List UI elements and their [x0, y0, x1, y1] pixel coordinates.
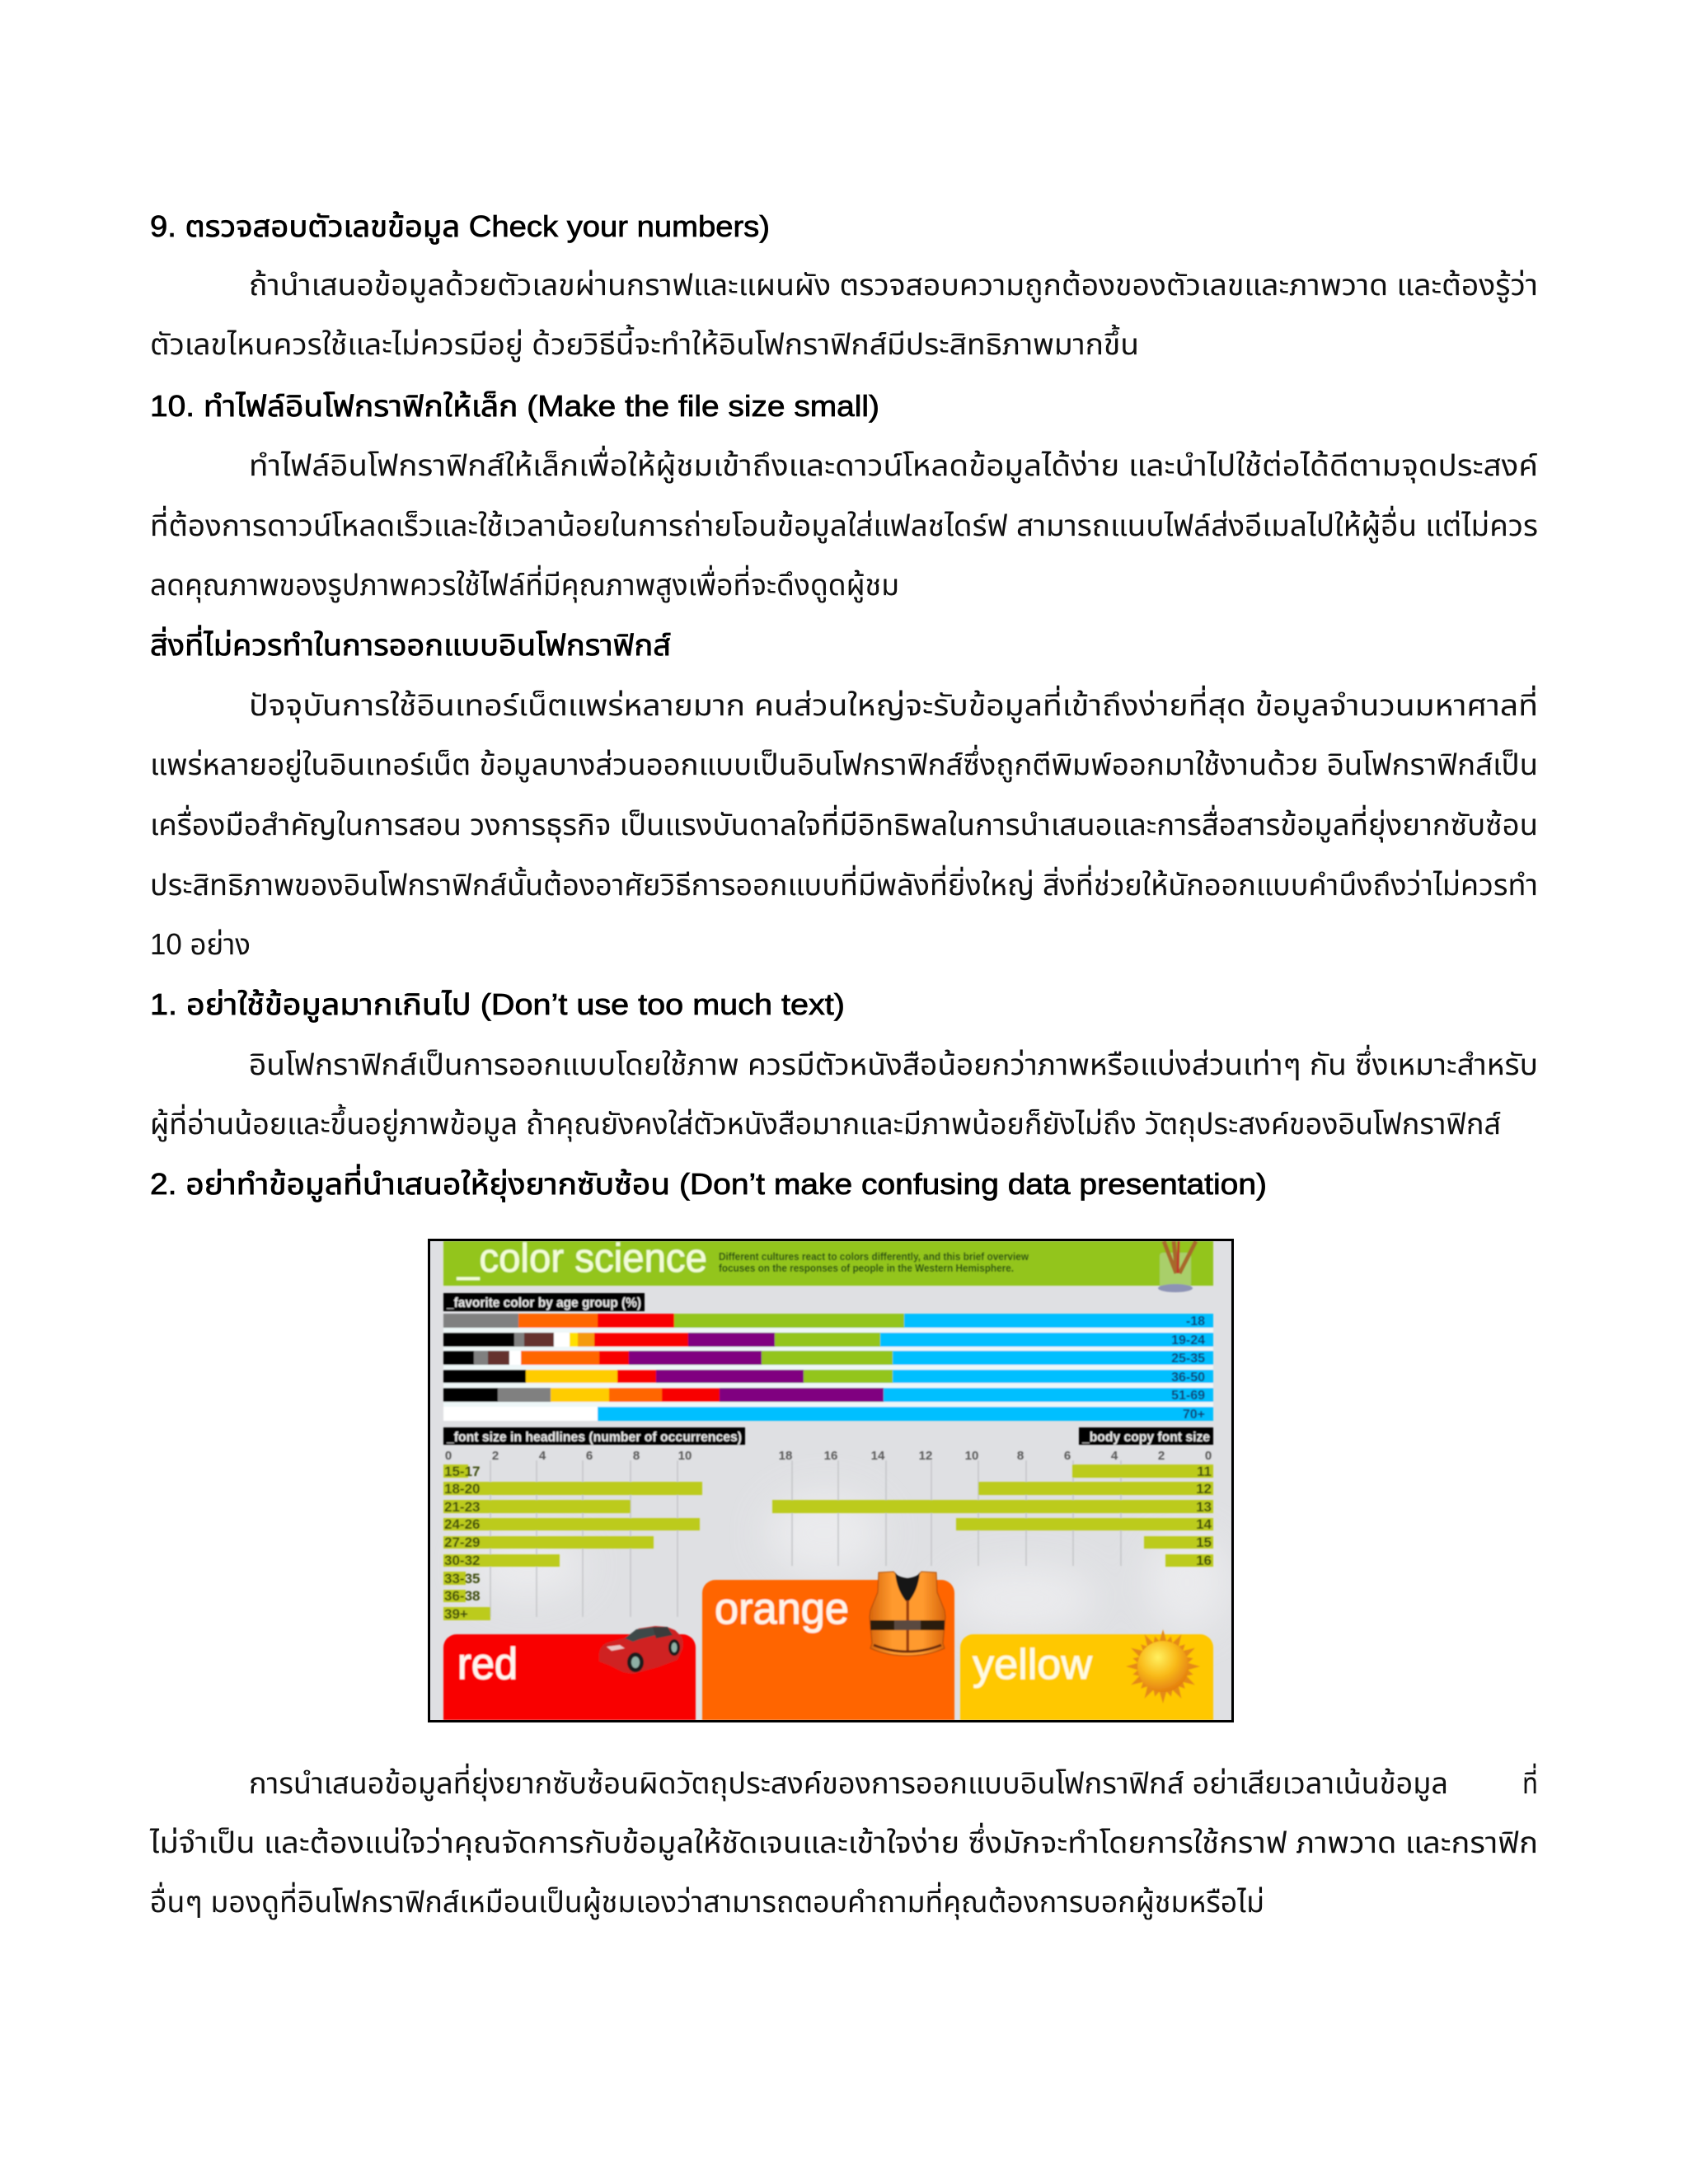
axis numbers: right: 4: [1111, 1449, 1118, 1463]
banner description: focuses on the responses of people in the Western Hemisphere.: [719, 1262, 1014, 1274]
panel: red: [443, 1626, 696, 1720]
axis numbers: left: 4: [539, 1449, 546, 1463]
paragraph: too much text: [150, 1044, 1538, 1141]
heading: 1 do not use too much text: 1. อย่าใช้ข้อมูลมากเกินไป (Don’t use too much text): [150, 987, 845, 1022]
bar labels: body sizes: 11: [1197, 1464, 1212, 1479]
banner description: [719, 1250, 1029, 1274]
paragraph: things not to do: 10 อย่าง: [150, 927, 251, 961]
yellow label: yellow: [973, 1641, 1092, 1689]
bar labels: headline sizes: 15-17: [444, 1464, 480, 1479]
banner title: _color science: [457, 1236, 707, 1281]
paragraph line 1 start: การนำเสนอข้อมูลที่ยุ่งยากซับซ้อนผิดวัตถุประสงค์ของการออกแบบอินโฟกราฟิกส์ อย่าเสียเวลาเน้นข้อมูล: [249, 1763, 1448, 1801]
paragraph: check your numbers: [150, 268, 1538, 362]
figure: color science infographic: [429, 1236, 1233, 1721]
bar labels: headline sizes: 18-20: [444, 1481, 480, 1497]
bar labels: headline sizes: 30-32: [444, 1553, 480, 1568]
bars: headline sizes: [443, 1465, 702, 1620]
stacked bar chart: favorite color by age group: [443, 1314, 1213, 1422]
bar labels: headline sizes: [444, 1464, 480, 1622]
panel: yellow: [960, 1629, 1213, 1720]
bar labels: body sizes: 14: [1196, 1516, 1212, 1532]
axis numbers: right: 6: [1064, 1449, 1071, 1463]
axis numbers: right: [779, 1449, 1212, 1463]
heading: 9 check your numbers: 9. ตรวจสอบตัวเลขข้อมูล Check your numbers): [150, 209, 770, 244]
paragraph: too much text: ผู้ที่อ่านน้อยและขึ้นอยู่ภาพข้อมูล ถ้าคุณยังคงใส่ตัวหนังสือมากและมีภาพน้อยก็ยังไม่ถึง วัตถุประสงค์ของอินโฟกราฟิกส์: [150, 1104, 1501, 1141]
text block: lower document text: [149, 1763, 1538, 1919]
icon: pencil jar: [1158, 1241, 1196, 1292]
axis numbers: right: 12: [919, 1449, 932, 1463]
text block: upper document text: [150, 209, 1538, 1202]
axis numbers: right: 10: [965, 1449, 978, 1463]
axis numbers: right: 2: [1158, 1449, 1165, 1463]
figure paper background: [430, 1241, 1231, 1720]
bar labels: headline sizes: 27-29: [444, 1535, 480, 1550]
label: body copy font size: _body copy font size: [1081, 1429, 1210, 1445]
paragraph: check your numbers: ถ้านำเสนอข้อมูลด้วยตัวเลขผ่านกราฟและแผนผัง ตรวจสอบความถูกต้องของตัวเลขและภาพวาด และต้องรู้ว่า: [249, 268, 1538, 302]
bar labels: headline sizes: 39+: [444, 1606, 468, 1622]
heading: things not to do: สิ่งที่ไม่ควรทำในการออกแบบอินโฟกราฟิกส์: [150, 625, 671, 662]
row: 25-35: [443, 1351, 1213, 1366]
paragraph: things not to do: ปัจจุบันการใช้อินเทอร์เน็ตแพร่หลายมาก คนส่วนใหญ่จะรับข้อมูลที่เข้าถึงง่ายที่สุด ข้อมูลจำนวนมหาศาลที่: [249, 685, 1538, 723]
paragraph: too much text: อินโฟกราฟิกส์เป็นการออกแบบโดยใช้ภาพ ควรมีตัวหนังสือน้อยกว่าภาพหรือแบ่งส่วนเท่าๆ กัน ซึ่งเหมาะสำหรับ: [249, 1044, 1538, 1081]
bars: body sizes: [772, 1465, 1213, 1567]
paragraph lines 2 and 3: ไม่จำเป็น และต้องแน่ใจว่าคุณจัดการกับข้อมูลให้ชัดเจนและเข้าใจง่าย ซึ่งมักจะทำโดยการใช้กราฟ ภาพวาด และกราฟิก: [149, 1822, 1538, 1860]
banner: color science: [443, 1236, 1213, 1292]
bar labels: headline sizes: 21-23: [444, 1499, 480, 1515]
icon: life vest: [870, 1572, 945, 1656]
row: 70+: 70+: [1183, 1408, 1205, 1422]
paragraph: file size: [150, 445, 1538, 602]
axis numbers: right: 16: [824, 1449, 837, 1463]
bar labels: headline sizes: 33-35: [444, 1571, 480, 1586]
panel: orange: [702, 1572, 954, 1720]
axis numbers: right: 18: [779, 1449, 792, 1463]
bar labels: body sizes: [1196, 1464, 1212, 1568]
label: font size in headlines: _font size in headlines (number of occurrences): [446, 1429, 742, 1445]
bar labels: body sizes: 15: [1196, 1535, 1212, 1550]
row: 25-35: 25-35: [1171, 1352, 1205, 1366]
row: 19-24: 19-24: [1171, 1333, 1205, 1347]
paragraph: file size: ทำไฟล์อินโฟกราฟิกส์ให้เล็กเพื่อให้ผู้ชมเข้าถึงและดาวน์โหลดข้อมูลได้ง่าย และนำไปใช้ต่อได้ดีตามจุดประสงค์: [249, 445, 1538, 483]
figure content: [443, 1236, 1213, 1720]
label: favorite color by age group: _favorite color by age group (%): [446, 1295, 641, 1310]
chart: body copy font size: [772, 1449, 1213, 1568]
chart: headline font size occurrences: [443, 1449, 702, 1622]
axis numbers: right: 14: [871, 1449, 885, 1463]
row: under 18: -18: [1186, 1315, 1205, 1329]
axis numbers: right: 8: [1017, 1449, 1024, 1463]
heading: 2 do not make confusing data presentation: 2. อย่าทำข้อมูลที่นำเสนอให้ยุ่งยากซับซ้อน (Don’t make confusing data presentation): [150, 1164, 1267, 1202]
paragraph: file size: ลดคุณภาพของรูปภาพควรใช้ไฟล์ที่มีคุณภาพสูงเพื่อที่จะดึงดูดผู้ชม: [150, 565, 899, 602]
axis numbers: right: 0: [1205, 1449, 1212, 1463]
row: 36-50: [443, 1370, 1213, 1385]
banner description: Different cultures react to colors differently, and this brief overview: [719, 1250, 1029, 1263]
paragraph lines 2 and 3: อื่นๆ มองดูที่อินโฟกราฟิกส์เหมือนเป็นผู้ชมเองว่าสามารถตอบคำถามที่คุณต้องการบอกผู้ชมหรือไม่: [150, 1882, 1264, 1919]
axis numbers: left: 0: [445, 1449, 452, 1463]
row: 51-69: [443, 1388, 1213, 1403]
bar labels: body sizes: 13: [1196, 1499, 1212, 1515]
paragraph: file size: ที่ต้องการดาวน์โหลดเร็วและใช้เวลาน้อยในการถ่ายโอนข้อมูลใส่แฟลชไดร์ฟ สามารถแนบไฟล์ส่งอีเมลไปให้ผู้อื่น แต่ไม่ควร: [150, 505, 1538, 543]
paragraph: things not to do: ประสิทธิภาพของอินโฟกราฟิกส์นั้นต้องอาศัยวิธีการออกแบบที่มีพลังที่ยิ่งใหญ่ สิ่งที่ช่วยให้นักออกแบบคำนึงถึงว่าไม่ควรทำ: [150, 865, 1538, 902]
bar labels: body sizes: 16: [1196, 1553, 1212, 1568]
paragraph: check your numbers: ตัวเลขไหนควรใช้และไม่ควรมีอยู่ ด้วยวิธีนี้จะทำให้อินโฟกราฟิกส์มีประสิทธิภาพมากขึ้น: [150, 324, 1139, 362]
row: 51-69: 51-69: [1171, 1389, 1205, 1403]
red label: red: [457, 1639, 518, 1689]
row: 70+: [443, 1407, 1213, 1422]
bar labels: headline sizes: 24-26: [444, 1516, 480, 1532]
row: under 18: [443, 1314, 1213, 1329]
orange label: orange: [715, 1584, 849, 1633]
bar labels: headline sizes: 36-38: [444, 1588, 480, 1604]
axis numbers: left: [445, 1449, 692, 1463]
axis numbers: left: 6: [586, 1449, 593, 1463]
paragraph line 1 end: ที่: [1522, 1763, 1538, 1800]
icon: sun: [1126, 1629, 1200, 1704]
paragraph: things not to do: แพร่หลายอยู่ในอินเทอร์เน็ต ข้อมูลบางส่วนออกแบบเป็นอินโฟกราฟิกส์ซึ่งถูกตีพิมพ์ออกมาใช้งานด้วย อินโฟกราฟิกส์เป็น: [150, 744, 1538, 782]
heading: 10 make the file size small: 10. ทำไฟล์อินโฟกราฟิกให้เล็ก (Make the file size small): [150, 389, 879, 423]
axis numbers: left: 8: [633, 1449, 640, 1463]
row: 36-50: 36-50: [1171, 1371, 1205, 1385]
axis numbers: left: 10: [678, 1449, 692, 1463]
row: 19-24: [443, 1333, 1213, 1347]
axis numbers: left: 2: [492, 1449, 499, 1463]
paragraph: things not to do: [150, 685, 1538, 961]
icon: red car: [599, 1626, 683, 1674]
bar labels: body sizes: 12: [1196, 1481, 1212, 1497]
paragraph lines 2 and 3: [149, 1822, 1538, 1919]
paragraph: things not to do: เครื่องมือสำคัญในการสอน วงการธุรกิจ เป็นแรงบันดาลใจที่มีอิทธิพลในการนำเสนอและการสื่อสารข้อมูลที่ยุ่งยากซับซ้อน: [150, 804, 1538, 842]
